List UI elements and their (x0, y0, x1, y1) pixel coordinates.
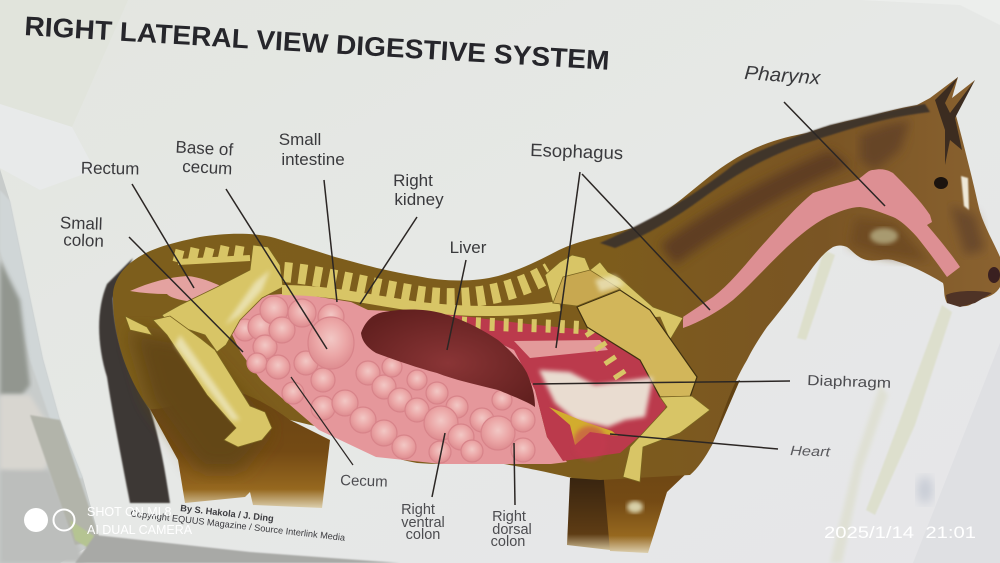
camera watermark (24, 505, 976, 542)
horse mane (600, 104, 930, 248)
coat shading (130, 120, 985, 470)
ischium (125, 316, 152, 335)
label: right dorsal colon: dorsal (492, 522, 532, 538)
left background behind poster (0, 169, 100, 563)
skeleton (125, 245, 710, 482)
horse body and neck (113, 77, 1000, 480)
label: right ventral colon: Right (401, 502, 435, 518)
label: liver: Liver (450, 238, 487, 257)
title: RIGHT LATERAL VIEW DIGESTIVE SYSTEM (24, 11, 610, 76)
spine (282, 290, 560, 311)
label: right dorsal colon: Right (492, 509, 526, 525)
label: small intestine: Small (279, 130, 321, 149)
right fold (913, 343, 1000, 563)
label: small intestine: intestine (281, 150, 345, 169)
credits: By S. Hakola / J. Ding (180, 503, 274, 524)
esophagus in thorax (514, 340, 608, 358)
chest cavity (437, 313, 670, 461)
abdominal cavity (225, 293, 567, 464)
ears and forelock (935, 77, 975, 165)
label: heart: Heart (790, 443, 832, 459)
knee highlight (627, 501, 643, 513)
face markings (870, 176, 1000, 307)
label: small colon: Small (60, 213, 103, 234)
horse hind legs (130, 320, 330, 508)
label: right ventral colon: ventral (401, 515, 445, 531)
horse illustration (99, 77, 1000, 553)
watermark icon (24, 508, 74, 532)
rectum (130, 276, 223, 302)
tail vertebrae (177, 246, 240, 262)
horse front legs (567, 470, 610, 550)
timestamp: 2025/1/14 21:01 (824, 524, 976, 542)
horse tail (99, 258, 170, 503)
glue stains (797, 250, 835, 340)
label: diaphragm: Diaphragm (807, 373, 891, 392)
liver (361, 309, 535, 407)
watermark text: SHOT ON MI 8 (87, 505, 172, 519)
lung and heart vessels (539, 370, 653, 460)
label: base of cecum: cecum (182, 157, 233, 178)
label: cecum: Cecum (340, 472, 388, 491)
lower rib tips (590, 330, 630, 390)
label: rectum: Rectum (81, 158, 140, 179)
label: base of cecum: Base of (175, 137, 234, 159)
hind leg bones (153, 316, 272, 447)
thoracic vertebrae and spinal processes (545, 255, 683, 340)
shoulder blade top (553, 270, 620, 306)
leader lines (129, 102, 885, 505)
credits: Copyright EQUUS Magazine / Source Interlink Media (130, 508, 346, 543)
scapula and humerus (577, 290, 697, 397)
pelvis (162, 245, 283, 352)
bone highlights (175, 270, 625, 420)
labels (59, 62, 891, 550)
foreleg bones (623, 396, 710, 482)
label: pharynx: Pharynx (744, 62, 822, 89)
label: small colon: colon (63, 230, 104, 251)
label: right dorsal colon: colon (491, 534, 525, 550)
watermark text: AI DUAL CAMERA (87, 523, 193, 537)
ribs (420, 319, 590, 328)
label: esophagus: Esophagus (530, 140, 624, 163)
label: right kidney: kidney (394, 190, 444, 209)
label: right kidney: Right (393, 171, 433, 190)
pharynx and esophagus (pink band) (683, 169, 960, 328)
label: right ventral colon: colon (406, 527, 440, 543)
poster bottom edge (75, 535, 400, 563)
intestine loops (234, 296, 535, 463)
dorsal processes (284, 272, 550, 298)
